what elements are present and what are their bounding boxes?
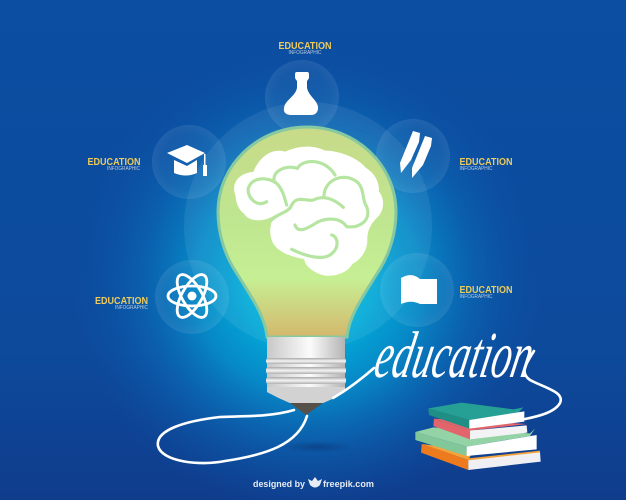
icon: atom [168,270,216,322]
label: left lower: INFOGRAPHIC [115,305,148,311]
footer credit: designed by [253,479,305,489]
book: green [415,427,537,456]
label: right lower [460,284,512,300]
label: top: INFOGRAPHIC [288,50,322,56]
label: top: EDUCATION [278,40,332,52]
brain folds [248,162,368,257]
badge: book [380,253,454,327]
book: teal top [428,403,524,429]
halo circle behind bulb [184,102,432,350]
icon: flask [284,72,318,115]
label: top [278,40,332,56]
book: orange bottom [421,444,541,470]
bulb screw base [266,337,346,415]
label: left upper [88,156,140,172]
floor shadow [281,441,353,453]
label: left upper: EDUCATION [88,156,140,168]
stack of books [415,403,541,470]
label: right upper [460,156,512,172]
bulb glass [218,127,396,337]
icon: graduation cap [167,145,207,176]
label: right upper: EDUCATION [460,156,512,168]
book: red [433,419,527,439]
label: left lower: EDUCATION [95,295,148,307]
footer credit: freepik.com [323,479,374,489]
badge: pens [376,119,450,193]
footer credit [253,477,374,489]
icon: freepik crown [308,477,322,488]
badge: flask [265,60,339,134]
light bulb [218,127,396,415]
label: left upper: INFOGRAPHIC [107,166,140,172]
badge: atom [155,260,229,334]
power cord [158,351,561,463]
label: right lower: INFOGRAPHIC [460,294,493,300]
brain [234,147,383,276]
badge: graduation cap [152,125,226,199]
label: right lower: EDUCATION [460,284,512,296]
icon: open book [401,275,437,304]
label: left lower [95,295,148,311]
label: right upper: INFOGRAPHIC [460,166,493,172]
icon: pens [400,131,432,178]
